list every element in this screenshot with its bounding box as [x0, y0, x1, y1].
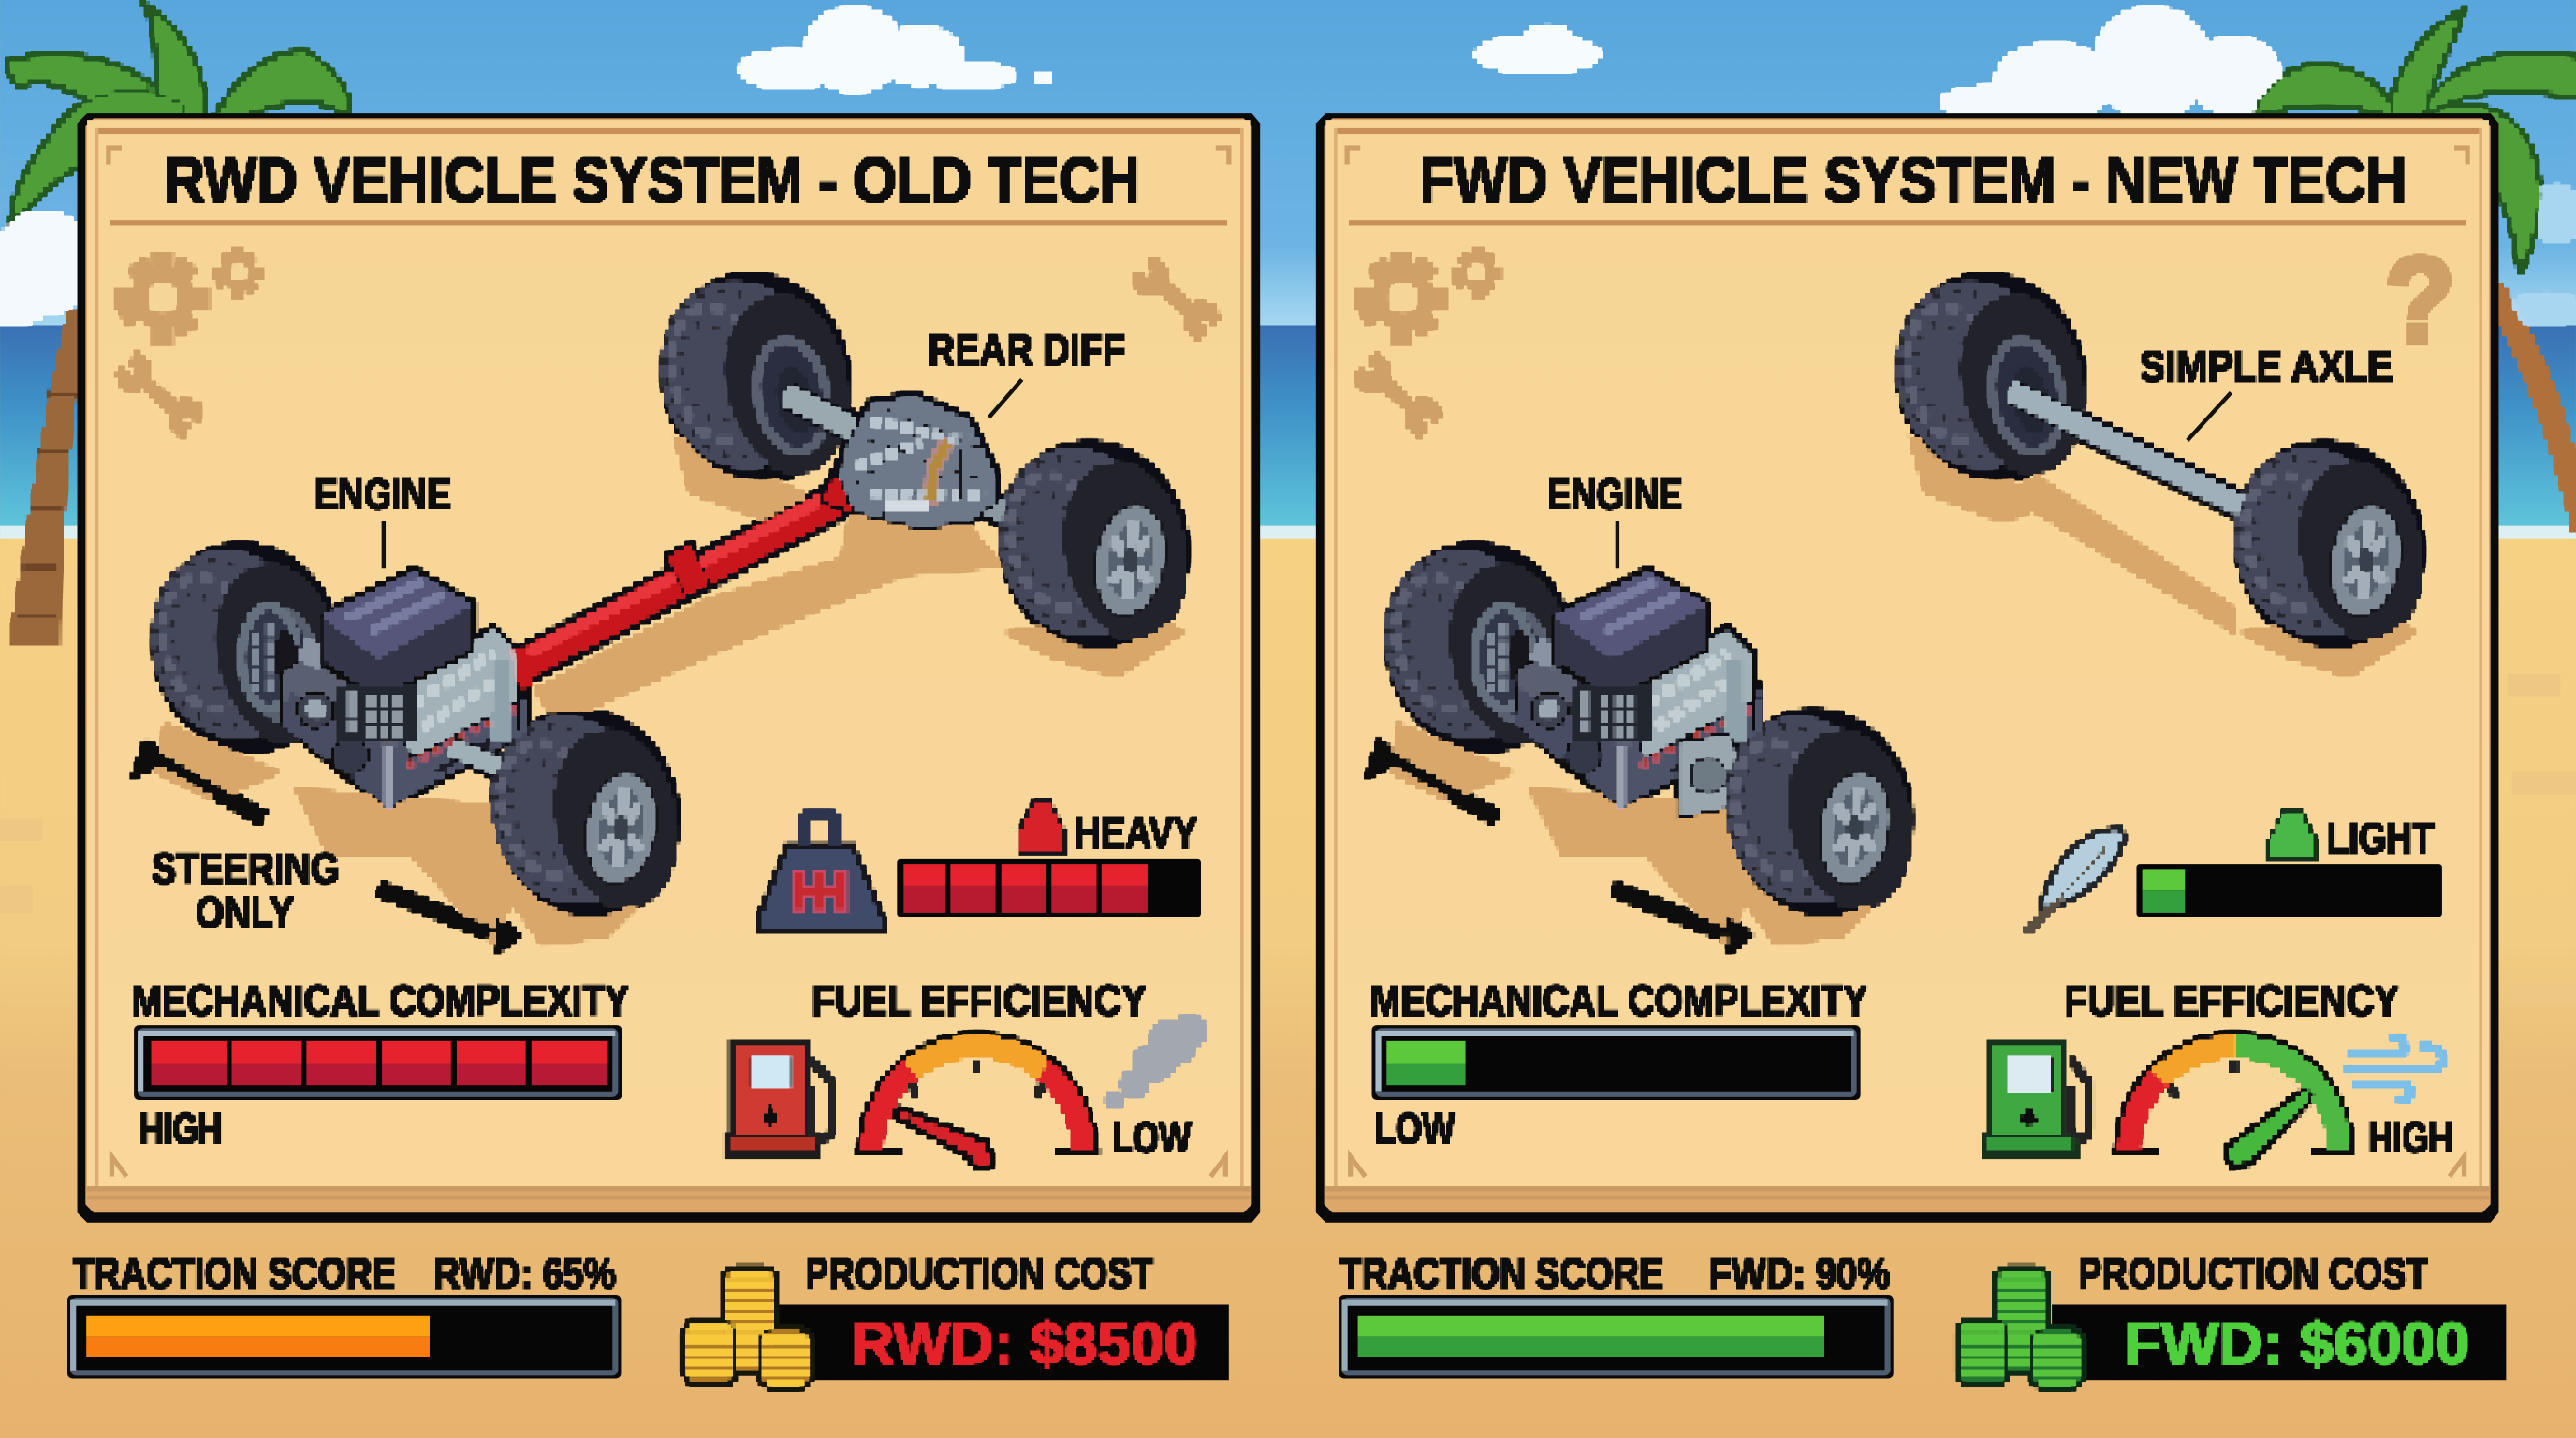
label: simple axle: SIMPLE AXLE	[2140, 342, 2393, 390]
weight readout: heavy	[759, 801, 1201, 930]
wheel rear right	[2213, 420, 2446, 670]
palm left trunk	[10, 312, 85, 644]
shadows	[1390, 435, 2415, 945]
chart: fuel gauge high	[2115, 1035, 2354, 1165]
icon: question mark: ?	[2385, 231, 2454, 368]
label: PRODUCTION COST	[805, 1249, 1153, 1298]
vehicle diagram: FWD drivetrain	[1364, 253, 2446, 955]
label: steering only	[152, 844, 339, 937]
footer: RWD production cost	[685, 1249, 1229, 1387]
weight readout: light	[2027, 812, 2442, 932]
label: steering only: STEERING	[152, 844, 339, 892]
label: MECHANICAL COMPLEXITY	[1370, 976, 1868, 1025]
icon: small green weight	[2271, 812, 2315, 858]
title: RWD VEHICLE SYSTEM - OLD TECH	[165, 144, 1140, 216]
mechanical complexity meter	[131, 976, 629, 1152]
sand patches	[0, 674, 2576, 1003]
needle	[894, 1109, 992, 1168]
footer: RWD traction score	[67, 1249, 621, 1378]
value: RWD: $8500	[851, 1312, 1197, 1377]
decorative gears and wrench	[1355, 249, 1500, 439]
footer: FWD traction score	[1339, 1249, 1894, 1378]
cloud left edge	[0, 211, 92, 325]
bar: complexity high	[134, 1025, 622, 1100]
label: PRODUCTION COST	[2078, 1249, 2428, 1298]
label: low: LOW	[1374, 1104, 1455, 1152]
value box	[775, 1304, 1229, 1380]
label: MECHANICAL COMPLEXITY	[131, 976, 629, 1025]
drive shaft	[522, 466, 851, 666]
engine	[1515, 570, 1760, 808]
bar: weight heavy	[897, 859, 1201, 917]
chart: fuel gauge low	[856, 1035, 1099, 1168]
icon: wind	[2346, 1037, 2442, 1099]
panel frame	[1316, 113, 2498, 1223]
leader: rear diff	[989, 379, 1022, 418]
front axle stub	[452, 748, 513, 772]
palm left fronds	[8, 8, 349, 222]
sand	[0, 539, 2576, 1438]
label: FUEL EFFICIENCY	[2064, 976, 2399, 1025]
leader: simple axle	[2188, 392, 2231, 440]
footer: FWD production cost	[1958, 1249, 2506, 1387]
fuel efficiency gauge	[1986, 976, 2452, 1165]
wheel rear left	[639, 253, 872, 503]
rear differential	[838, 394, 999, 529]
label: FUEL EFFICIENCY	[812, 976, 1147, 1025]
label: engine: ENGINE	[1547, 470, 1682, 519]
bar: complexity low	[1372, 1025, 1861, 1100]
shadows	[156, 435, 1183, 945]
icon: feather	[2027, 829, 2123, 932]
cloud right edge	[2510, 184, 2576, 325]
mechanical complexity meter	[1370, 976, 1868, 1152]
background art	[0, 7, 2576, 1003]
steering arrow down	[379, 888, 520, 955]
panel: RWD vehicle system	[78, 113, 1260, 1223]
transaxle	[1679, 733, 1745, 818]
leader: engine	[383, 521, 385, 568]
label: TRACTION SCORE	[1339, 1249, 1663, 1298]
label: engine: ENGINE	[315, 470, 451, 519]
panel: FWD vehicle system	[1316, 113, 2498, 1223]
label: high: HIGH	[2368, 1113, 2452, 1162]
value: FWD: 90%	[1708, 1249, 1890, 1298]
title: FWD VEHICLE SYSTEM - NEW TECH	[1419, 144, 2407, 216]
sea	[0, 325, 2576, 536]
icon: red fuel pump	[728, 1045, 831, 1153]
steering arrow down	[1613, 888, 1753, 955]
value: FWD: $6000	[2124, 1312, 2469, 1377]
label: TRACTION SCORE	[72, 1249, 396, 1298]
wheel front right	[1703, 689, 1935, 938]
wheel rear left	[1875, 253, 2107, 503]
bar: traction 65	[67, 1295, 621, 1378]
sky	[0, 0, 2576, 327]
label: steering only: ONLY	[196, 888, 294, 937]
icon: small red weight	[1020, 801, 1063, 851]
icon: heavy kettlebell weight	[759, 814, 883, 930]
label: low: LOW	[1112, 1113, 1192, 1162]
bar: traction 90	[1339, 1295, 1894, 1378]
palm right trunk	[2494, 283, 2576, 559]
icon: green fuel pump	[1986, 1045, 2089, 1153]
cloud 2	[1475, 24, 1600, 74]
label: light: LIGHT	[2327, 814, 2434, 862]
cloud 1	[739, 7, 1051, 92]
wheel front left	[1364, 522, 1597, 772]
label: rear diff: REAR DIFF	[929, 326, 1125, 374]
panel frame	[78, 113, 1260, 1223]
palm right fronds	[2254, 13, 2576, 271]
value box	[2052, 1304, 2506, 1380]
steering arrow up	[131, 740, 263, 818]
wheel front right	[469, 689, 701, 938]
label: heavy: HEAVY	[1075, 809, 1197, 858]
value: RWD: 65%	[433, 1249, 616, 1298]
label: high: HIGH	[139, 1104, 222, 1152]
simple axle	[2011, 391, 2247, 509]
decorative gears and wrenches	[117, 249, 1219, 439]
icon: smoke	[1105, 1016, 1206, 1109]
foam	[0, 526, 2576, 540]
icon: green coins	[1958, 1269, 2082, 1387]
needle	[2226, 1090, 2313, 1165]
shaft joint	[518, 649, 526, 687]
leader: engine	[1617, 521, 1618, 568]
steering arrow up	[1365, 740, 1497, 818]
wheel rear right	[978, 420, 1210, 670]
icon: gold coins	[685, 1269, 810, 1387]
fuel efficiency gauge	[728, 976, 1206, 1168]
wheel front left	[130, 522, 363, 772]
rear axle	[785, 394, 1027, 522]
vehicle diagram: RWD drivetrain	[130, 253, 1210, 955]
engine	[281, 570, 526, 808]
bar: weight light	[2136, 864, 2442, 917]
cloud 3	[1940, 7, 2280, 122]
